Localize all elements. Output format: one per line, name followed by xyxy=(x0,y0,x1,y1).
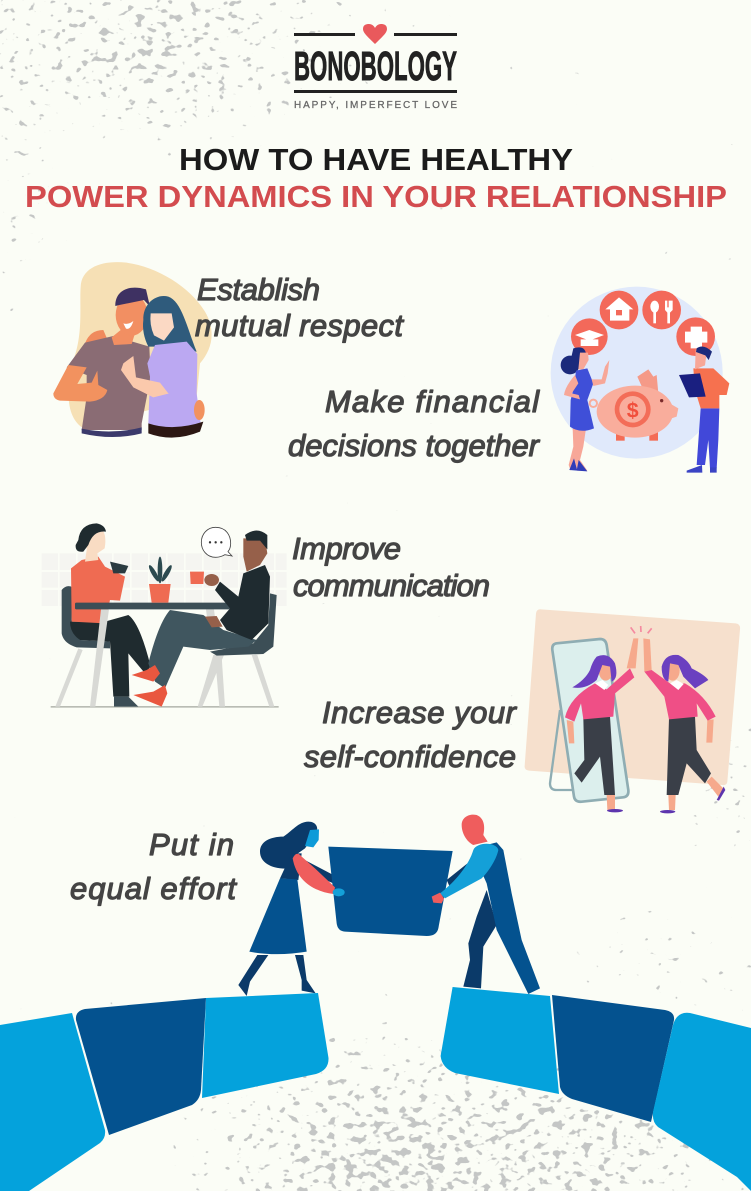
text: establish mutual respect xyxy=(195,272,404,343)
text: establish mutual respect: Establish xyxy=(197,272,320,307)
mirror reflection woman xyxy=(565,638,638,812)
text: put in equal effort: Put in xyxy=(149,827,234,862)
man xyxy=(132,530,270,707)
logo: Bonobology: HAPPY, IMPERFECT LOVE xyxy=(294,100,457,111)
text: increase your self-confidence: Increase your xyxy=(322,695,518,730)
title: HOW TO HAVE HEALTHY xyxy=(179,142,573,177)
illustration: couple with piggy bank xyxy=(551,287,729,473)
logo: Bonobology: BONOBOLOGY xyxy=(294,43,457,89)
text: put in equal effort: equal effort xyxy=(70,871,237,906)
illustration: broken bridge, left side xyxy=(0,993,329,1191)
text: improve communication xyxy=(292,531,490,603)
text: make financial decisions together: decisions together xyxy=(288,428,541,463)
text: make financial decisions together: Make financial xyxy=(325,384,540,419)
icon: house xyxy=(600,291,638,329)
table xyxy=(75,603,230,707)
text: improve communication: communication xyxy=(293,568,490,603)
illustration: couple hugging xyxy=(53,262,212,438)
title xyxy=(25,142,727,214)
illustration: two people carrying a block xyxy=(238,815,540,996)
illustration: woman high-fiving her mirror reflection xyxy=(525,609,740,813)
logo: Bonobology xyxy=(294,24,457,111)
plant xyxy=(147,557,173,603)
text: put in equal effort xyxy=(70,827,237,906)
woman in blue dress xyxy=(561,347,609,471)
text: increase your self-confidence xyxy=(304,695,518,774)
man with clipboard xyxy=(679,346,729,473)
text: improve communication: Improve xyxy=(292,531,401,566)
title: POWER DYNAMICS IN YOUR RELATIONSHIP xyxy=(25,179,727,214)
icon: medical cross xyxy=(676,317,715,356)
text: make financial decisions together xyxy=(288,384,541,463)
illustration: couple talking at a table xyxy=(40,523,287,708)
text: increase your self-confidence: self-confidence xyxy=(304,739,516,774)
real woman xyxy=(643,638,725,813)
text: establish mutual respect: mutual respect xyxy=(195,308,404,343)
icon: piggy bank: $ xyxy=(627,398,639,422)
illustration: broken bridge, right side xyxy=(441,987,751,1191)
man xyxy=(432,815,540,994)
icon: fork and spoon xyxy=(642,291,681,329)
woman xyxy=(238,822,345,996)
icon: heart xyxy=(363,24,387,44)
icon: piggy bank xyxy=(590,369,678,441)
block being carried xyxy=(328,847,453,936)
icon: graduation cap xyxy=(571,318,608,355)
speech bubble xyxy=(201,527,232,557)
woman xyxy=(70,523,151,707)
